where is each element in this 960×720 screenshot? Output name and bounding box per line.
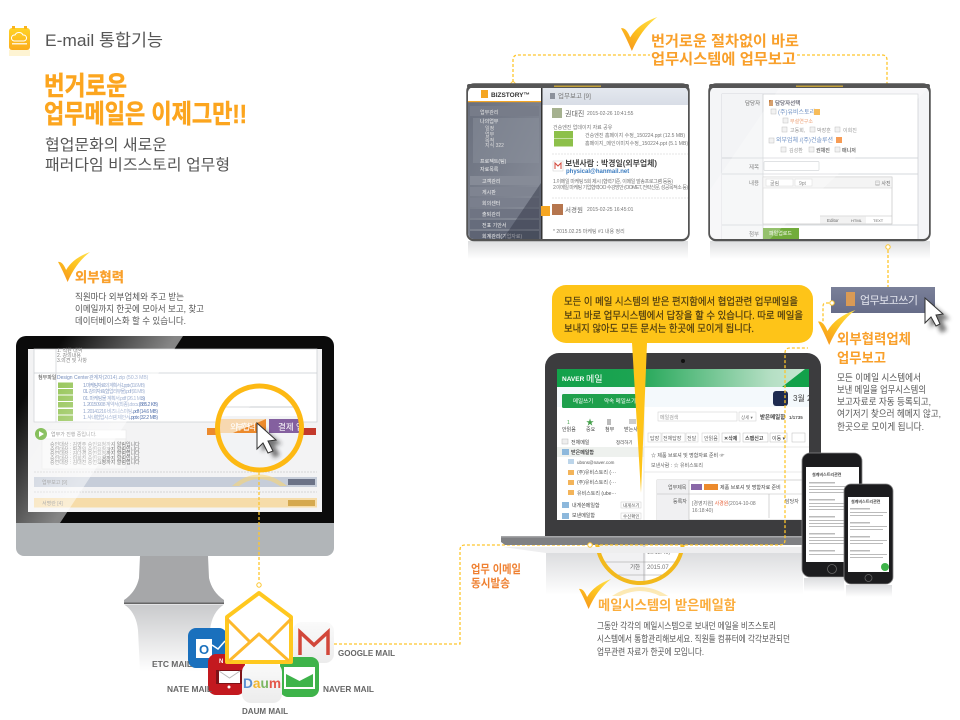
mail detail table: 업무제목: [668, 484, 687, 491]
text: external collaboration: 데이터베이스화 할 수 있습니다.: [75, 315, 186, 326]
panel: report form screenshot: 9pt: [799, 181, 807, 187]
monitor screen: 업무보고 [9]: [42, 479, 68, 486]
mail list toolbar: 전체답장: [663, 435, 682, 442]
sidebar: 프로젝트(팀): [480, 158, 507, 165]
panel: report form screenshot: 고동희,: [790, 127, 805, 134]
icon: gmail: [293, 622, 334, 663]
panel: report form screenshot: TEXT: [873, 218, 884, 223]
panel: work report screenshot: 보낸사람 : 박경일(외부업체): [565, 158, 657, 168]
subtitle: 협업문화의 새로운: [45, 136, 167, 154]
panel: work report screenshot: physical@hanmail.net: [566, 169, 629, 175]
panel: work report screenshot: * 2015.02.25 마케팅 #1 내용 정리: [553, 228, 625, 235]
panel: report form screenshot: 박장훈: [817, 127, 831, 134]
monitor screen: [28, 347, 322, 512]
sidebar shade: [503, 183, 541, 239]
stand base line: [124, 602, 224, 604]
phone: front: 설계비스트리관련: [851, 498, 881, 504]
panel: work report screenshot: 건승엔진 홈페이지 수정_150224.ppt (12.5 MB): [585, 132, 685, 139]
mail header: [557, 369, 809, 387]
icon: daum mail: [242, 663, 282, 703]
mail list toolbar: 메일검색: [660, 414, 679, 421]
laptop screen: NAVER: [562, 376, 585, 383]
icon: outlook: [188, 628, 227, 668]
screen gloss: [16, 336, 183, 523]
laptop: [501, 353, 846, 553]
mail detail table: 등록자: [673, 498, 687, 505]
icon: outlook: O: [199, 642, 209, 657]
mail list toolbar: 이동 ▾: [772, 435, 786, 442]
mail sidebar: 첨부: [605, 427, 615, 433]
subtitle: 패러다임 비즈스토리 업무형: [45, 156, 230, 174]
magnifier: 결제 업: [278, 422, 304, 432]
panel: work report screenshot: 홈페이지_메인이미지수정_150224.ppt (5.1 MB): [585, 140, 688, 147]
panel: work report screenshot: 1.이메일 마케팅 5회 제시 (협력기준, 이메일 발송프로그램 등등): [553, 178, 673, 185]
phone reflections: [804, 578, 892, 597]
panel: work report screenshot: 2015-02-26 10:41:55: [587, 111, 634, 117]
panel: report form screenshot: 김성환: [789, 147, 803, 154]
panel: work report screenshot: 건승엔진 업데이지 자료 공유: [553, 124, 613, 131]
mail sidebar: 1: [567, 420, 570, 426]
main headline: 번거로운: [44, 71, 127, 101]
monitor screen: 2. 강의내용: [57, 352, 81, 359]
magnifier: 외부협력: [230, 422, 256, 432]
text: external company report: 여기저기 찾으러 헤메지 않고,: [837, 408, 941, 420]
connector: laptop to external company: [588, 348, 808, 547]
monitor screen: 3.의견 및 사항: [57, 357, 87, 364]
sidebar: 지식 322: [485, 142, 504, 149]
heading: external company report: 업무보고: [837, 350, 886, 366]
mail sidebar: 내게쓴메일함: [572, 502, 600, 509]
connector: button to check mark: [823, 301, 834, 322]
mail list toolbar: 전달: [687, 435, 697, 442]
orange toggle: [541, 206, 550, 216]
monitor screen: 업무가 진행 중입니다.: [51, 431, 97, 438]
laptop underside panel: 16:18:40): [647, 550, 670, 556]
panel reflection: [468, 241, 688, 259]
monitor screen: 1. 20141216 비즈니스미팅.pdf (14.6 MB): [83, 408, 158, 415]
heading: external collaboration: 외부협력: [75, 270, 124, 285]
monitor screen: 1. 20150908 계약서(최종).docx (885.2 KB): [83, 401, 158, 408]
mail sidebar: 수신확인: [623, 513, 640, 520]
mail list toolbar: ✕삭제: [724, 435, 738, 442]
text: received mailbox: 업무관련 자료가 한곳에 모입니다.: [597, 646, 704, 657]
text: external collaboration: 직원마다 외부업체와 주고 받는: [75, 291, 184, 302]
app icon: [9, 26, 30, 56]
panel: report form screenshot: 권해진: [816, 147, 830, 154]
mail list toolbar: 안읽음: [704, 435, 718, 442]
connector: envelope to laptop: [294, 545, 587, 644]
mail list toolbar: 상세 ▾: [741, 414, 754, 421]
sidebar: 고객관리: [482, 178, 500, 185]
callout: 모든 이 메일 시스템의 받은 편지함에서 협업관련 업무메일을: [564, 295, 798, 308]
panel: report form screenshot: HTML: [851, 218, 863, 223]
cursor: [257, 423, 282, 458]
icon: central envelope: [227, 593, 291, 662]
sidebar: 일정: [485, 125, 494, 132]
labels: mail services: GOOGLE MAIL: [338, 648, 395, 658]
sidebar: 자료목록: [480, 166, 499, 173]
label: simultaneous send: 업무 이메일: [471, 562, 521, 576]
panel: report form screenshot: 제목: [749, 163, 759, 171]
mail sidebar: ★: [586, 418, 594, 427]
laptop underside panel: 기한: [630, 563, 640, 571]
icon: nate mail: [208, 654, 245, 695]
monitor screen: 1. 마케팅자료의 계획서-1.pptx (11.6 MB): [83, 382, 145, 389]
mail detail table: 담당자: [785, 498, 799, 505]
mail sidebar: ubsns@naver.com: [577, 460, 615, 465]
connector: monitor to envelope: [257, 472, 261, 587]
check mark: external collaboration: [58, 252, 90, 282]
panel: report form screenshot: 파일업로드: [769, 230, 792, 237]
monitor screen: 1. 직원 내역: [57, 347, 82, 354]
mail sidebar: 받는사: [624, 426, 638, 433]
mail sidebar: (주)유비스토리 (···: [577, 469, 616, 476]
mail list toolbar: 받은메일함: [760, 413, 785, 421]
text: external company report: 보고자료로 자동 등록되고,: [837, 397, 931, 408]
mail sidebar: 중요: [586, 427, 596, 433]
phone: back: [802, 453, 862, 577]
magnifier: [215, 384, 304, 472]
labels: mail services: [152, 648, 395, 716]
connector: form to report button: [886, 245, 890, 287]
mail detail table: [657, 480, 809, 520]
panel: report form screenshot: [709, 84, 930, 259]
sidebar: 게시판: [482, 189, 496, 196]
heading: report without procedures: [651, 33, 799, 68]
text: external company report: [837, 372, 941, 433]
labels: mail services: ETC MAIL: [152, 659, 192, 669]
mail sidebar: 보낸메일함: [572, 512, 595, 519]
label: simultaneous send: 동시발송: [471, 577, 510, 590]
check mark: received mailbox: [579, 579, 611, 609]
laptop screen: 메일쓰기: [573, 397, 593, 405]
heading: report without procedures: 번거로운 절차없이 바로: [651, 33, 799, 50]
sidebar: 출퇴관리: [482, 211, 500, 218]
section title: E-mail 통합기능: [45, 31, 163, 50]
panel: report form screenshot: 부설연구소: [790, 118, 813, 125]
heading: external company report: 외부협력업체: [837, 331, 911, 347]
mail list toolbar: [644, 407, 809, 520]
monitor screen: Design Center관계자(2014).zip (50.3 MB): [57, 374, 149, 381]
panel: report form screenshot: 내용: [749, 179, 759, 187]
mail list toolbar: 스팸신고: [745, 435, 764, 442]
sidebar: [468, 87, 541, 240]
mail list toolbar: ☆ 제품 브로셔 및 명함자료 준비 ☞: [651, 452, 725, 459]
laptop base: [501, 536, 846, 545]
text: received mailbox: 시스템에서 통합관리해보세요. 직원들 컴퓨터에 각각보관되던: [597, 633, 790, 644]
monitor body: [16, 336, 334, 523]
sidebar: 업무관리: [480, 109, 498, 116]
laptop underside panel: [546, 545, 803, 596]
laptop screen: 약속 메일쓰기: [604, 397, 636, 405]
monitor screen: 첨부파일: [38, 374, 57, 381]
panel: report form screenshot: 매니저: [842, 147, 856, 154]
label: simultaneous send: [471, 562, 521, 590]
callout: 보내지 않아도 모든 문서는 한곳에 모이게 됩니다.: [564, 322, 754, 335]
report button: 업무보고쓰기: [860, 294, 918, 307]
icon: nate mail: N: [219, 659, 223, 665]
mail sidebar: 유비스토리 (ube···: [577, 490, 617, 497]
sidebar: 나의업무: [480, 118, 499, 125]
monitor screen: 승인대상 : 김나경 승인요청까지 알림입니다: [50, 450, 140, 457]
check mark: external company: [818, 310, 855, 345]
panel: report form screenshot: ▤ 사진: [875, 180, 891, 187]
mail list toolbar: 보낸사람 : ☆ 유비스토리: [651, 462, 703, 469]
panel: report form screenshot: (주)유비스토리: [778, 108, 815, 116]
icon: daum mail: Daum: [243, 676, 281, 691]
panel: report form screenshot: 굴림: [770, 180, 779, 187]
desktop monitor: [16, 336, 334, 672]
panel: work report screenshot: 권대진: [565, 109, 584, 118]
mail sidebar: 정리하기: [616, 439, 633, 446]
monitor screen: 승인대상 : 이희진 승인요청까지 알림입니다: [50, 455, 140, 462]
sidebar: 회의센터: [482, 200, 500, 207]
laptop screen: [557, 369, 812, 520]
text: received mailbox: 그동안 각각의 메일시스템으로 보내던 메일을 비즈스토리: [597, 620, 776, 631]
text: external company report: 모든 이메일 시스템에서: [837, 372, 921, 384]
callout: 보고 바로 업무시스템에서 답장을 할 수 있습니다. 따로 메일을: [564, 309, 803, 322]
panel: report form screenshot: 이희진: [843, 127, 857, 134]
sidebar: 회계관리(기업자료): [482, 233, 522, 240]
panel: report form screenshot: Editor: [827, 218, 839, 223]
mail sidebar: 받은메일함: [571, 449, 594, 456]
connector: top: [511, 55, 887, 86]
panel: work report screenshot: [467, 84, 689, 259]
sidebar: BIZSTORY™: [491, 92, 530, 99]
heading: received mailbox: 메일시스템의 받은메일함: [598, 598, 737, 613]
icon: naver mail: [280, 657, 319, 697]
laptop screen: 3월 2: [793, 393, 812, 403]
laptop bezel: [545, 353, 821, 536]
panel reflection: [710, 241, 930, 259]
mail list toolbar: 답장: [650, 435, 660, 442]
mail detail table: [경영지원] 사경원(2014-10-08: [692, 500, 756, 507]
text: external company report: 한곳으로 모이게 됩니다.: [837, 421, 924, 433]
panel: work report screenshot: 서경원: [565, 205, 583, 214]
text: external collaboration: [75, 291, 204, 326]
laptop screen: 메일: [586, 374, 603, 384]
text: external company report: 보낸 메일을 업무시스템의: [837, 384, 926, 396]
monitor screen: 1. 사내협업시스템 제안서.pptx (32.2 MB): [83, 414, 158, 421]
mail sidebar: 전체메일: [571, 439, 590, 446]
sidebar: 전표 기안서: [482, 222, 506, 229]
monitor stand: [124, 556, 224, 603]
panel: report form screenshot: 첨부: [749, 231, 759, 238]
sidebar: 목적: [485, 137, 494, 144]
text: received mailbox: [597, 620, 790, 657]
mail detail table: 16:18:40): [692, 508, 713, 514]
panel: work report screenshot: 2015-02-25 16:45:01: [587, 207, 634, 213]
monitor screen: 01. 강의자료(협업리뷰물).pdf (91 MB): [83, 388, 145, 395]
monitor screen: 승인대상 : 김대진 승인요청까지 알림입니다: [50, 459, 140, 466]
subtitle: [45, 136, 230, 174]
mail detail table: 제품 브로셔 및 명함자료 준비: [720, 484, 781, 491]
check mark: no procedures: [621, 17, 657, 51]
monitor chin: [16, 523, 334, 556]
panel: report form screenshot: 담당자선택: [775, 99, 800, 107]
text: external collaboration: 이메일까지 한곳에 모아서 보고, 찾고: [75, 304, 204, 314]
cursor: [925, 298, 950, 333]
stand reflection: [124, 604, 224, 672]
panel: report form screenshot: 담당자: [745, 99, 760, 107]
callout: [552, 285, 813, 493]
magnifier reflection: [232, 474, 287, 486]
panel: report form screenshot: 외부업체 /(주)건솔루션: [776, 136, 833, 144]
monitor screen: 승인대상 : 김영주 승인요청까지 알림입니다: [50, 441, 140, 448]
mail sidebar: 내게쓰기: [623, 502, 640, 509]
main headline: [44, 71, 247, 129]
heading: report without procedures: 업무시스템에 업무보고: [651, 51, 796, 68]
monitor screen: 서명란 [4]: [42, 500, 63, 507]
phone: back: 설계비스트리관련: [812, 471, 842, 477]
report button: [831, 287, 935, 313]
base reflection: [503, 547, 840, 553]
panel: work report screenshot: 업무보고 [9]: [558, 92, 591, 100]
panel: work report screenshot: 2.이메일 마케팅 기업협력OO 수강방안 (OOMET, 전략신문, 성공목적소 등): [553, 184, 688, 191]
sidebar: 업무: [485, 131, 495, 138]
mail sidebar: [557, 418, 644, 520]
labels: mail services: NAVER MAIL: [323, 684, 374, 694]
labels: mail services: DAUM MAIL: [242, 706, 288, 716]
mail sidebar: 안읽음: [562, 426, 576, 433]
monitor screen: 승인대상 : 박경일 승인요청까지 알림입니다: [50, 446, 140, 453]
main headline: 업무메일은 이제그만!!: [44, 99, 247, 129]
mail list toolbar: 1/1735: [789, 415, 803, 420]
phone: front: [844, 484, 893, 584]
heading: external company report: [837, 331, 911, 366]
monitor screen: 01. 마케팅물 계획서.pdf (26.1 MB): [83, 395, 145, 402]
laptop underside panel: 2015.07: [647, 565, 669, 571]
mail sidebar: (주)유비스토리 (···: [577, 479, 616, 486]
labels: mail services: NATE MAIL: [167, 684, 212, 694]
